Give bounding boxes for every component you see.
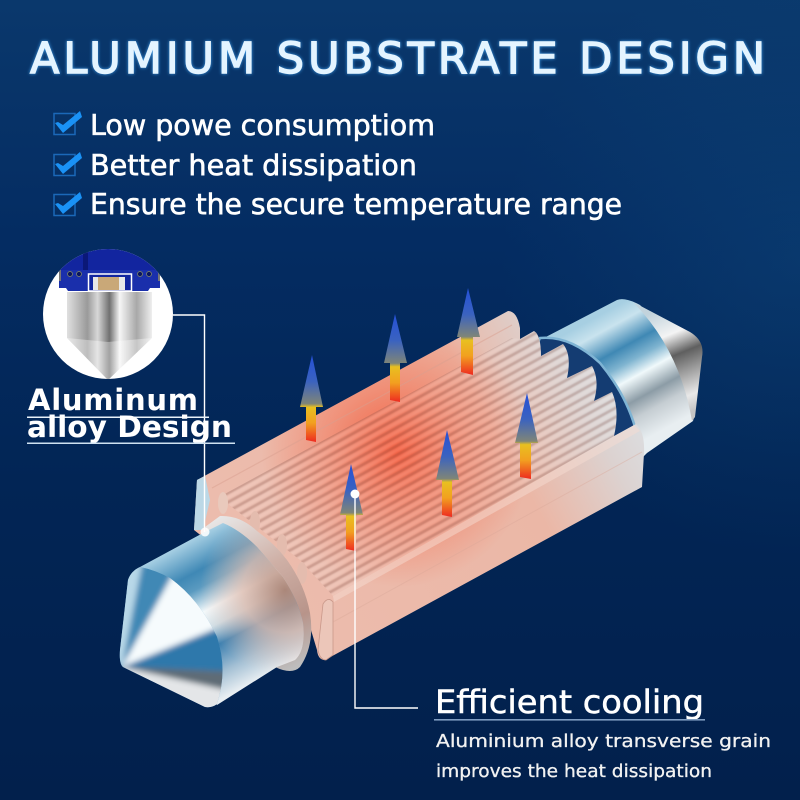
title: ALUMIUM SUBSTRATE DESIGN — [30, 34, 765, 84]
arrow 4 — [340, 464, 363, 551]
callout line: aluminium design — [173, 315, 210, 536]
left metal cap — [120, 523, 304, 708]
arrow 3 — [457, 288, 480, 375]
heading: aluminum alloy design: alloy Design — [27, 410, 232, 444]
arrow 6 — [515, 393, 538, 479]
callout line: efficient cooling — [350, 490, 418, 708]
title: ALUMIUM SUBSTRATE DESIGN — [30, 34, 765, 84]
benefit text 3: Ensure the secure temperature range — [90, 188, 622, 221]
arrow 1 — [300, 355, 323, 442]
icon: checkbox 3 — [54, 192, 82, 216]
benefit list — [54, 109, 622, 221]
inner opening ring — [530, 338, 635, 450]
icon: checkbox 1 — [54, 111, 82, 134]
description text — [436, 731, 771, 782]
heading: aluminum alloy design: Aluminum — [28, 383, 198, 417]
aluminium fin block — [194, 311, 644, 660]
right metal cap — [540, 299, 702, 480]
arrow 5 — [436, 430, 459, 517]
description text: Aluminium alloy transverse grain — [436, 731, 771, 752]
inset: aluminium detail circle — [43, 249, 173, 379]
heading: efficient cooling: Efficient cooling — [435, 683, 704, 721]
festoon bulb illustration — [120, 299, 702, 708]
heading: aluminum alloy design — [27, 383, 235, 444]
description text: improves the heat dissipation — [436, 761, 712, 782]
icon: checkbox 2 — [54, 152, 82, 176]
benefit text 1: Low powe consumptiom — [90, 109, 435, 142]
arrow 2 — [384, 314, 407, 402]
benefit text 2: Better heat dissipation — [90, 149, 417, 182]
heat arrows — [300, 288, 538, 551]
left ring — [205, 516, 311, 671]
